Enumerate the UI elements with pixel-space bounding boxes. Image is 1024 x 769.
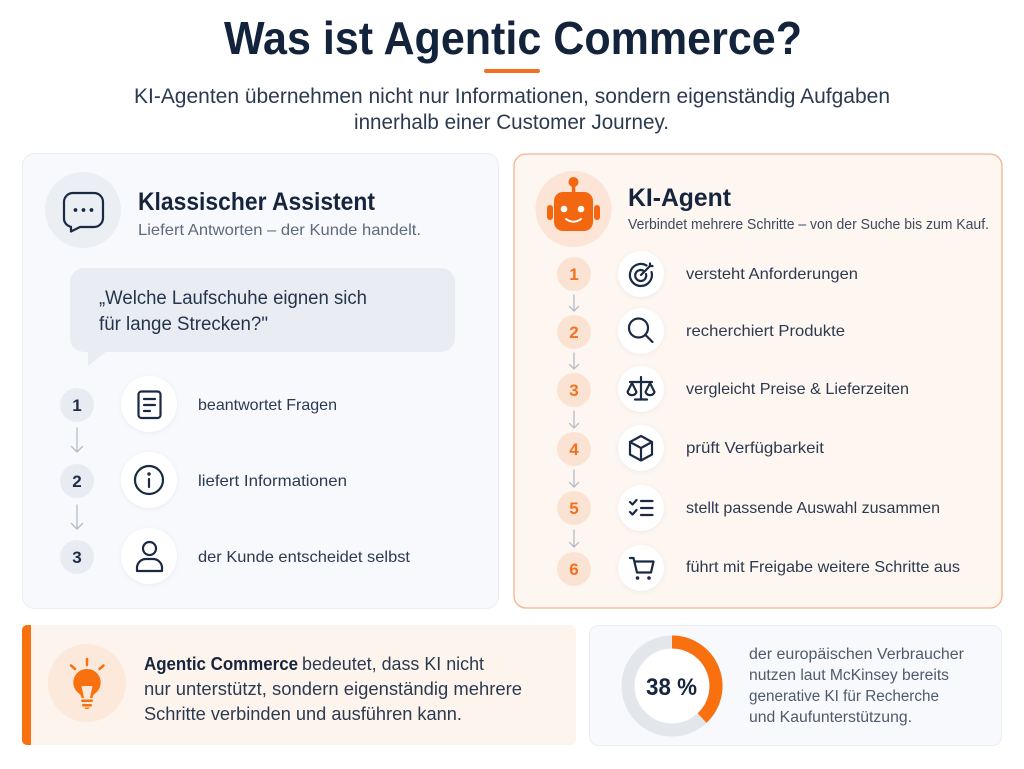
- subheading: Liefert Antworten – der Kunde handelt.: [138, 222, 421, 239]
- step 2: liefert Informationen: liefert Informationen: [198, 473, 347, 490]
- speech bubble: question: [70, 268, 455, 366]
- arrow: [72, 428, 82, 452]
- step 2: liefert Informationen: [60, 452, 347, 508]
- statistic description: nutzen laut McKinsey bereits: [749, 667, 949, 684]
- step 1: beantwortet Fragen: [60, 376, 337, 432]
- subtitle: [134, 85, 890, 134]
- heading: KI-Agent: KI-Agent: [628, 184, 732, 212]
- subtitle: innerhalb einer Customer Journey.: [354, 111, 669, 134]
- speech bubble: question: für lange Strecken?": [99, 314, 268, 335]
- step 1: versteht Anforderungen: 1: [569, 265, 579, 284]
- step 3: der Kunde entscheidet selbst: 3: [72, 548, 82, 567]
- step 1: beantwortet Fragen: 1: [72, 396, 82, 415]
- step 2: recherchiert Produkte: 2: [569, 323, 579, 342]
- step 5: stellt passende Auswahl zusammen: [557, 485, 940, 531]
- step 4: prüft Verfügbarkeit: prüft Verfügbarkeit: [686, 440, 825, 457]
- subtitle: KI-Agenten übernehmen nicht nur Informationen, sondern eigenständig Aufgaben: [134, 85, 890, 108]
- step 3: vergleicht Preise & Lieferzeiten: vergleicht Preise & Lieferzeiten: [686, 381, 909, 398]
- callout text: Agentic Commerce: [144, 654, 298, 674]
- step 4: prüft Verfügbarkeit: [557, 425, 825, 471]
- statistic description: [749, 646, 964, 726]
- step 1: versteht Anforderungen: [557, 251, 858, 297]
- callout text: nur unterstützt, sondern eigenständig mehrere: [144, 679, 522, 699]
- step 5: stellt passende Auswahl zusammen: 5: [569, 499, 579, 518]
- step 3: der Kunde entscheidet selbst: [60, 528, 411, 584]
- panel: statistic: [590, 626, 1002, 746]
- step 6: führt mit Freigabe weitere Schritte aus: [557, 545, 960, 591]
- arrow: [570, 411, 578, 428]
- callout: definition: [22, 625, 576, 745]
- step 1: versteht Anforderungen: versteht Anforderungen: [686, 266, 858, 283]
- subheading: Verbindet mehrere Schritte – von der Suche bis zum Kauf.: [628, 217, 989, 233]
- statistic description: generative KI für Recherche: [749, 688, 939, 705]
- arrow: [570, 295, 578, 311]
- panel: KI-Agent: [514, 154, 1002, 608]
- arrow: [570, 353, 578, 369]
- donut chart: 38 %: [628, 642, 716, 730]
- step 3: vergleicht Preise & Lieferzeiten: [557, 366, 909, 412]
- title: Was ist Agentic Commerce?: [224, 12, 802, 64]
- arrow: [570, 470, 578, 487]
- step 5: stellt passende Auswahl zusammen: stellt passende Auswahl zusammen: [686, 500, 940, 517]
- step 4: prüft Verfügbarkeit: 4: [569, 440, 579, 459]
- step 1: beantwortet Fragen: beantwortet Fragen: [198, 397, 337, 414]
- statistic description: und Kaufunterstützung.: [749, 709, 912, 726]
- step 2: recherchiert Produkte: recherchiert Produkte: [686, 323, 845, 340]
- arrow: [570, 530, 578, 547]
- donut chart: 38 %: 38 %: [646, 674, 697, 701]
- speech bubble: question: „Welche Laufschuhe eignen sich: [99, 288, 367, 309]
- title accent underline: [484, 69, 540, 73]
- icon: light bulb: [48, 644, 126, 722]
- arrow: [72, 505, 82, 529]
- step 6: führt mit Freigabe weitere Schritte aus: 6: [569, 560, 579, 579]
- panel: Klassischer Assistent: [22, 154, 498, 608]
- statistic description: der europäischen Verbraucher: [749, 646, 964, 663]
- heading: Klassischer Assistent: Klassischer Assistent: [138, 188, 376, 216]
- callout text: bedeutet, dass KI nicht: [302, 654, 484, 674]
- step 3: vergleicht Preise & Lieferzeiten: 3: [569, 381, 579, 400]
- step 2: recherchiert Produkte: [557, 308, 845, 354]
- icon: chat bubble: [45, 172, 121, 248]
- icon: robot: [536, 171, 612, 247]
- step 2: liefert Informationen: 2: [72, 472, 82, 491]
- callout text: [144, 654, 522, 724]
- step 6: führt mit Freigabe weitere Schritte aus: führt mit Freigabe weitere Schritte aus: [686, 559, 960, 576]
- step 3: der Kunde entscheidet selbst: der Kunde entscheidet selbst: [198, 549, 411, 566]
- callout text: Schritte verbinden und ausführen kann.: [144, 704, 462, 724]
